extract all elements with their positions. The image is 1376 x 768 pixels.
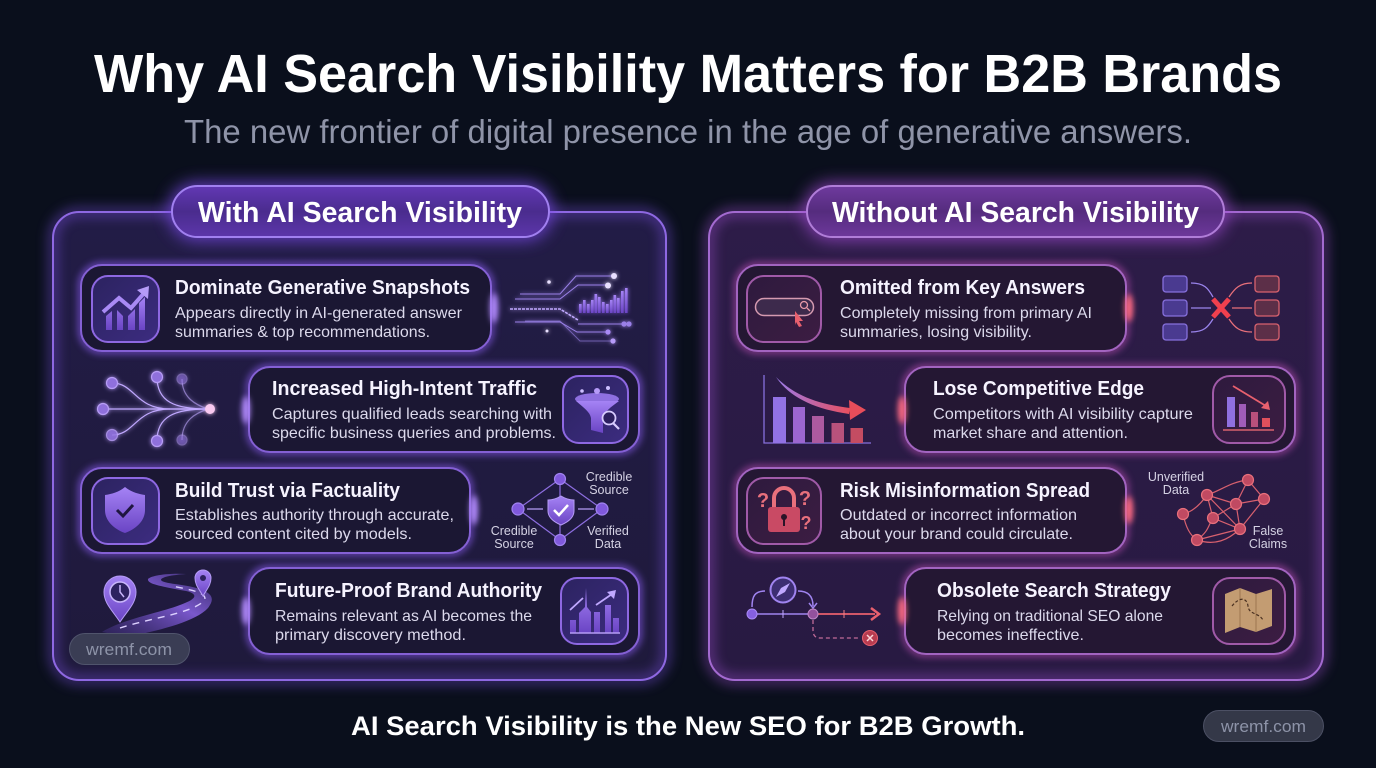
icon: falling bars <box>1213 376 1285 443</box>
heading pill: without: Without AI Search Visibility <box>832 197 1199 229</box>
text: dominate generative snapshots: summaries & top recommendations. <box>175 324 430 341</box>
card: obsolete search strategy <box>898 568 1295 654</box>
text: dominate generative snapshots <box>175 277 470 341</box>
text: risk misinformation spread: about your brand could circulate. <box>840 526 1073 543</box>
text: obsolete search strategy <box>937 580 1172 644</box>
panel: with AI search visibility <box>53 182 666 680</box>
graphic: misinformation network: Unverified <box>1148 470 1204 484</box>
text: increased high-intent traffic <box>272 378 556 442</box>
graphic: declining bar chart <box>764 375 871 443</box>
text: dominate generative snapshots: Appears directly in AI-generated answer <box>175 305 463 322</box>
graphic: misinformation network: Claims <box>1249 537 1287 551</box>
card: build trust via factuality <box>81 468 478 553</box>
text: lose competitive edge: Competitors with AI visibility capture <box>933 406 1193 423</box>
icon: skyline chart <box>561 578 628 644</box>
icon: shield with check <box>92 478 159 544</box>
text: dominate generative snapshots: Dominate Generative Snapshots <box>175 277 470 299</box>
text: future-proof brand authority: primary discovery method. <box>275 627 466 644</box>
text: omitted from key answers: summaries, losing visibility. <box>840 324 1032 341</box>
graphic: misinformation network: Data <box>1163 483 1189 497</box>
card: future-proof brand authority <box>242 568 639 654</box>
graphic: verified source network: Data <box>595 537 621 551</box>
text: lose competitive edge: Lose Competitive Edge <box>933 378 1144 400</box>
icon: funnel with magnifier <box>563 376 628 443</box>
heading pill: without <box>803 182 1228 241</box>
icon: rising chart <box>92 276 159 342</box>
graphic: verified source network: Credible <box>586 470 632 484</box>
text: risk misinformation spread: Outdated or incorrect information <box>840 507 1077 524</box>
watermark: panel: wremf.com <box>85 640 172 659</box>
icon: folded map <box>1213 578 1285 644</box>
icon: lock with question marks: ? <box>799 488 811 510</box>
text: build trust via factuality <box>175 480 454 543</box>
text: risk misinformation spread <box>840 480 1090 543</box>
footer tagline: AI Search Visibility is the New SEO for B2B Growth. <box>351 711 1025 741</box>
card: dominate generative snapshots <box>81 265 498 351</box>
graphic: verified source network: Verified <box>587 524 629 538</box>
graphic: outdated route timeline <box>747 578 879 646</box>
subtitle: The new frontier of digital presence in the age of generative answers. <box>184 113 1192 150</box>
text: lose competitive edge <box>933 378 1193 442</box>
graphic: verified source network: Credible <box>491 524 537 538</box>
icon: lock with question marks <box>747 478 821 544</box>
text: obsolete search strategy: Relying on traditional SEO alone <box>937 608 1163 625</box>
card: risk misinformation spread <box>737 468 1133 553</box>
title: Why AI Search Visibility Matters for B2B Brands <box>94 44 1282 104</box>
graphic: blocked flow diagram <box>1163 276 1279 340</box>
text: future-proof brand authority: Remains relevant as AI becomes the <box>275 608 532 625</box>
text: increased high-intent traffic: Increased High-Intent Traffic <box>272 378 537 400</box>
graphic: verified source network: Source <box>589 483 629 497</box>
text: future-proof brand authority: Future-Proof Brand Authority <box>275 580 543 602</box>
heading pill: with <box>168 182 553 241</box>
text: build trust via factuality: sourced content cited by models. <box>175 526 412 543</box>
text: omitted from key answers: Completely missing from primary AI <box>840 305 1092 322</box>
text: omitted from key answers <box>840 277 1092 341</box>
text: risk misinformation spread: Risk Misinformation Spread <box>840 480 1090 502</box>
graphic: verified source network: Source <box>494 537 534 551</box>
watermark: panel <box>70 634 190 664</box>
graphic: misinformation network <box>1148 470 1287 551</box>
heading pill: with: With AI Search Visibility <box>198 197 522 229</box>
icon: search bar with cursor <box>747 276 821 342</box>
graphic: data circuit with bars <box>510 273 632 344</box>
text: omitted from key answers: Omitted from Key Answers <box>840 277 1085 299</box>
text: increased high-intent traffic: specific business queries and problems. <box>272 425 556 442</box>
card: increased high-intent traffic <box>242 367 639 452</box>
card: lose competitive edge <box>898 367 1295 452</box>
panel: without AI search visibility <box>709 182 1323 680</box>
text: build trust via factuality: Establishes authority through accurate, <box>175 507 454 524</box>
graphic: misinformation network: False <box>1253 524 1283 538</box>
text: future-proof brand authority <box>275 580 543 644</box>
text: build trust via factuality: Build Trust via Factuality <box>175 480 401 502</box>
graphic: road with location pins <box>102 570 212 637</box>
watermark: footer: wremf.com <box>1220 717 1306 736</box>
text: obsolete search strategy: Obsolete Search Strategy <box>937 580 1172 602</box>
icon: lock with question marks: ? <box>757 490 769 512</box>
text: increased high-intent traffic: Captures qualified leads searching with <box>272 406 552 423</box>
text: lose competitive edge: market share and attention. <box>933 425 1128 442</box>
graphic: verified source network <box>491 470 632 551</box>
graphic: converging traffic streams <box>98 372 215 446</box>
icon: lock with question marks: ? <box>800 513 812 533</box>
card: omitted from key answers <box>737 265 1133 351</box>
text: obsolete search strategy: becomes ineffective. <box>937 627 1084 644</box>
watermark: footer <box>1204 710 1324 742</box>
